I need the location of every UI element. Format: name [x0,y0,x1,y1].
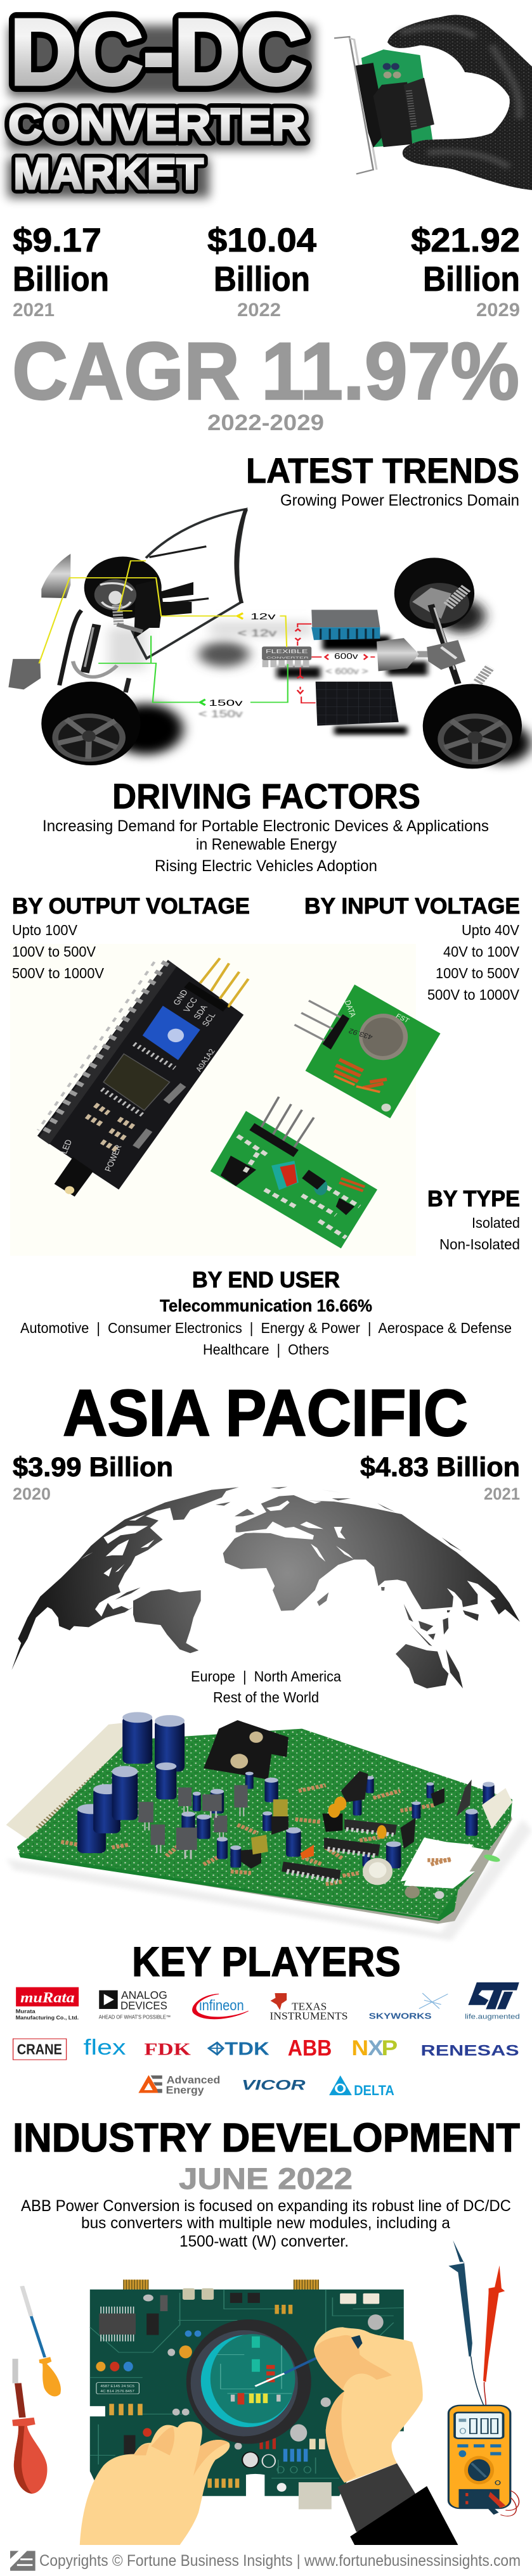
title: DC-DC Converter Market [8,0,315,198]
section: driving factors: in Renewable Energy [196,836,337,853]
logo: FDK: FDK [144,2039,191,2059]
logo: Renesas: RENESAS [421,2042,519,2059]
image: electric vehicle chassis with flexible converter: 600v [334,652,358,661]
components on board: 4587 E145 24 5C5 [100,2385,134,2388]
logo: Texas Instruments: TEXAS [292,2001,327,2013]
small smd parts [86,1105,134,1150]
title line: CONVERTER: CONVERTER [8,100,306,150]
segment: by input voltage: 500V to 1000V [427,986,520,1003]
stat: 2021 market size [13,222,109,321]
segment: by type: Isolated [472,1215,520,1231]
segment: by output voltage: Upto 100V [12,922,78,938]
connectors [356,63,387,148]
traces [90,2290,404,2478]
segment: by input voltage: 40V to 100V [443,943,520,960]
test probe: red [483,2266,505,2405]
heading: latest trends: Growing Power Electronics Domain [280,492,519,509]
logo: TDK: TDK [224,2038,269,2059]
flexible converter unit: FLEXIBLE [266,649,308,654]
logo: NXP: X [368,2036,384,2060]
segment: by type: Non-Isolated [439,1236,520,1253]
stat: 2021 market size: $9.17 [13,222,101,259]
section: driving factors [42,776,489,875]
left hand [80,2421,230,2545]
north america [11,1487,239,1670]
stat: Asia Pacific 2020 [13,1452,173,1503]
segment: by end user: Healthcare | Others [203,1341,329,1358]
inland seas [236,1500,353,1562]
board slots [404,1840,475,1889]
logo: Analog Devices [99,1989,171,2020]
australia [396,1644,448,1688]
green board [361,49,432,147]
segment: by input voltage: BY INPUT VOLTAGE [304,894,520,919]
silkscreen labels: GND [171,988,190,1007]
LCD adapter module: VCC [181,996,199,1014]
yellow 12v wiring [39,561,287,663]
logo: Delta [329,2075,394,2099]
test probe: blue [448,2240,484,2405]
image: populated circuit board [6,1712,532,1941]
stat: Asia Pacific 2020: $3.99 Billion [13,1452,173,1482]
logo: Texas Instruments: INSTRUMENTS [269,2010,347,2022]
heading: latest trends: LATEST TRENDS [246,450,519,490]
LCD adapter module [37,958,249,1197]
gold header pins [200,958,249,1007]
section: industry development: ABB Power Conversion is focused on expanding its robust line of DC/DC [21,2197,511,2215]
logo: Advanced Energy: Energy [166,2084,204,2096]
segment: by output voltage [12,894,250,981]
other regions [191,1668,341,1706]
logo: Crane: CRANE [17,2041,62,2058]
image: electric vehicle chassis with flexible converter [8,509,531,768]
LCD adapter module: SDA [191,1003,209,1021]
section: driving factors: Rising Electric Vehicles Adoption [155,857,377,875]
logo: Murata: Murata [16,2008,36,2014]
glove [387,15,532,190]
stat: 2022 market size: 2022 [237,300,281,321]
logo: Vicor: VICOR [242,2078,306,2093]
world map globe [11,1487,520,1688]
title shadow [8,25,315,198]
segment: by end user: BY END USER [192,1268,340,1292]
section: industry development: bus converters with multiple new modules, including a [81,2214,450,2232]
flexible converter unit: CONVERTER [266,656,309,660]
cuff [350,2486,458,2545]
other regions: Rest of the World [213,1689,319,1706]
flexible converter unit [262,647,311,667]
components on board: 4C B14 2576 8457 [100,2390,134,2393]
section: industry development: INDUSTRY DEVELOPMENT [13,2115,520,2160]
logo: Advanced Energy [138,2074,220,2096]
segment: by type: BY TYPE [427,1187,520,1211]
chip [103,1054,170,1111]
stat: CAGR: 2022-2029 [207,411,324,435]
logo: STMicroelectronics: life.augmented [465,2013,520,2020]
segment: by type [427,1187,520,1253]
segment: by end user: Automotive | Consumer Electronics | Energy & Power | Aerospace & Defense [20,1320,512,1336]
LCD adapter module: SCL [200,1011,217,1028]
segment: by input voltage: 100V to 500V [436,965,520,981]
stat: 2029 market size: 2029 [476,300,520,321]
rear axle and differential [417,647,434,661]
segment: by output voltage: 500V to 1000V [12,965,105,981]
front lower wheel [41,682,141,765]
south america [133,1589,201,1653]
iceland [216,1502,230,1506]
small capacitors [264,1778,278,1802]
solar panel [316,682,399,726]
integrated circuits [282,1861,341,1880]
company logos [13,1982,520,2099]
transmitter module [294,985,441,1118]
trim knob [363,1858,393,1885]
stat: Asia Pacific 2021: 2021 [484,1484,520,1503]
segment: by input voltage: Upto 40V [462,922,520,938]
madagascar and sri lanka [317,1587,385,1606]
stat: 2029 market size [411,222,520,321]
logo: Skyworks: SKYWORKS [369,2012,432,2020]
stat: 2022 market size: $10.04 [207,222,317,259]
stat: Asia Pacific 2021 [360,1452,520,1503]
logo: ABB: ABB [288,2036,332,2061]
logo: Murata: Manufacturing Co., Ltd. [16,2015,79,2020]
segment: by end user: Telecommunication 16.66% [160,1296,372,1315]
africa and eurasia [223,1495,520,1622]
right hand [314,2327,423,2483]
blurred label reflections [198,627,368,720]
logo: Infineon [193,1994,249,2019]
sleeve [337,2463,428,2532]
stat: Asia Pacific 2020: 2020 [13,1484,51,1503]
logo: Crane [13,2039,67,2060]
heading: Asia Pacific: ASIA PACIFIC [63,1377,468,1450]
voltage labels: 12v [250,613,276,622]
title line: DC-DC: DC-DC [10,0,307,105]
rear lower wheel [423,684,522,768]
battery pack [311,609,380,640]
jumper [55,1157,93,1197]
blurred label reflections: < 600v > [326,667,368,676]
logo: Advanced Energy: Advanced [167,2074,220,2086]
stat: 2021 market size: Billion [13,259,109,298]
logo: Texas Instruments [269,1993,347,2022]
logo: Murata [16,1987,79,2020]
glove highlights [400,27,519,167]
chip: left [99,2314,136,2335]
stat: 2029 market size: $21.92 [411,222,520,259]
logo: STMicroelectronics [465,1982,520,2020]
windshield frame [131,509,246,658]
section: driving factors: Increasing Demand for Portable Electronic Devices & Applications [42,817,489,835]
logo: Analog Devices: AHEAD OF WHAT'S POSSIBLE™ [99,2014,171,2020]
image: electronic modules [37,958,441,1248]
hudson bay and arctic gaps [81,1514,154,1576]
rear upper wheel [394,558,474,629]
section: industry development [13,2115,520,2250]
image: gloved hand holding circuit board [334,15,532,190]
probe tool [284,2354,326,2373]
segment: by output voltage: 100V to 500V [12,943,96,960]
blue trim potentiometer [143,1005,200,1060]
edge connector [6,1723,126,1846]
LCD adapter module: POWER [103,1144,124,1173]
LCD adapter module: A0A1A2 [193,1047,217,1073]
logo: NXP [351,2036,398,2060]
stat: 2022 market size [207,222,317,321]
title line: MARKET: MARKET [13,149,204,198]
multimeter [448,2406,519,2516]
green board [17,1729,512,1918]
stat: 2022 market size: Billion [214,259,310,298]
americas [11,1487,255,1670]
blurred label reflections: < 150v [198,708,243,720]
magnifying glass [186,2319,311,2444]
screwdriver: orange [22,2286,61,2396]
title line: MARKET: MARKET [13,149,204,198]
illustration: hands inspecting circuit board [12,2240,519,2545]
pacific islands [446,1649,463,1688]
logo: Analog Devices: ANALOG [121,1989,167,2001]
segment: by input voltage [304,894,520,1003]
segment: by end user [20,1268,512,1358]
image backdrop: module photo [10,944,416,1256]
resistor rows [61,1785,451,1884]
LCD adapter module: LED [58,1138,74,1155]
icon: Fortune Business Insights logo [10,2551,36,2571]
southeast asia islands [404,1604,479,1646]
screwdriver: red [12,2359,47,2494]
metal bracket [334,37,373,174]
heading: key players: KEY PLAYERS [132,1938,401,1985]
front upper wheel [84,557,162,619]
stat: 2021 market size: 2021 [13,300,55,321]
logo: Murata: muRata [20,1989,75,2006]
logo: Delta: DELTA [354,2083,394,2099]
heading: latest trends [246,450,519,509]
logo: NXP: N [351,2036,368,2060]
receiver module [211,1097,377,1248]
capacitors [383,63,391,70]
large capacitors [77,1804,106,1853]
section: industry development: JUNE 2022 [179,2162,353,2195]
transmitter module: DATA [342,999,358,1018]
components on board [96,2288,384,2509]
logo: Skyworks [369,1993,448,2020]
other regions: Europe | North America [191,1668,341,1685]
section: industry development: 1500-watt (W) converter. [179,2233,349,2250]
logo: Analog Devices: DEVICES [120,1999,167,2012]
stat: CAGR: CAGR 11.97% [12,326,519,417]
body panels [41,554,70,598]
stat: Asia Pacific 2021: $4.83 Billion [360,1452,520,1482]
section: driving factors: DRIVING FACTORS [112,776,420,816]
power transistors [138,1802,153,1830]
arctic islands [271,1487,462,1551]
cuba [115,1588,141,1600]
yellow and orange parts [273,1799,288,1816]
logo: Flex: flex [84,2035,126,2059]
metal plate [22,1811,512,1924]
logo: Infineon: infineon [199,1998,244,2014]
red 600v wiring [297,624,375,703]
transmitter module: 433.92 [347,1027,374,1042]
logo: NXP: P [381,2036,398,2060]
right side parts [482,1788,512,1829]
segment: by output voltage: BY OUTPUT VOLTAGE [12,894,250,919]
british isles [235,1509,255,1516]
stat: 2029 market size: Billion [423,259,520,298]
transmitter module: FST [394,1012,411,1024]
front suspension [117,604,119,625]
soft shadows [108,599,531,763]
image: electric vehicle chassis with flexible converter: 150v [209,698,243,708]
blurred label reflections: < 12v [238,627,276,639]
base plate shadow [7,1819,532,1941]
motor [377,638,419,671]
green 150v wiring [98,636,288,702]
circuit board [90,2290,404,2496]
title line: DC-DC: DC-DC [10,0,307,105]
connector box top [204,1720,289,1780]
gold fingers [123,2280,319,2290]
title line: CONVERTER: CONVERTER [8,100,306,150]
